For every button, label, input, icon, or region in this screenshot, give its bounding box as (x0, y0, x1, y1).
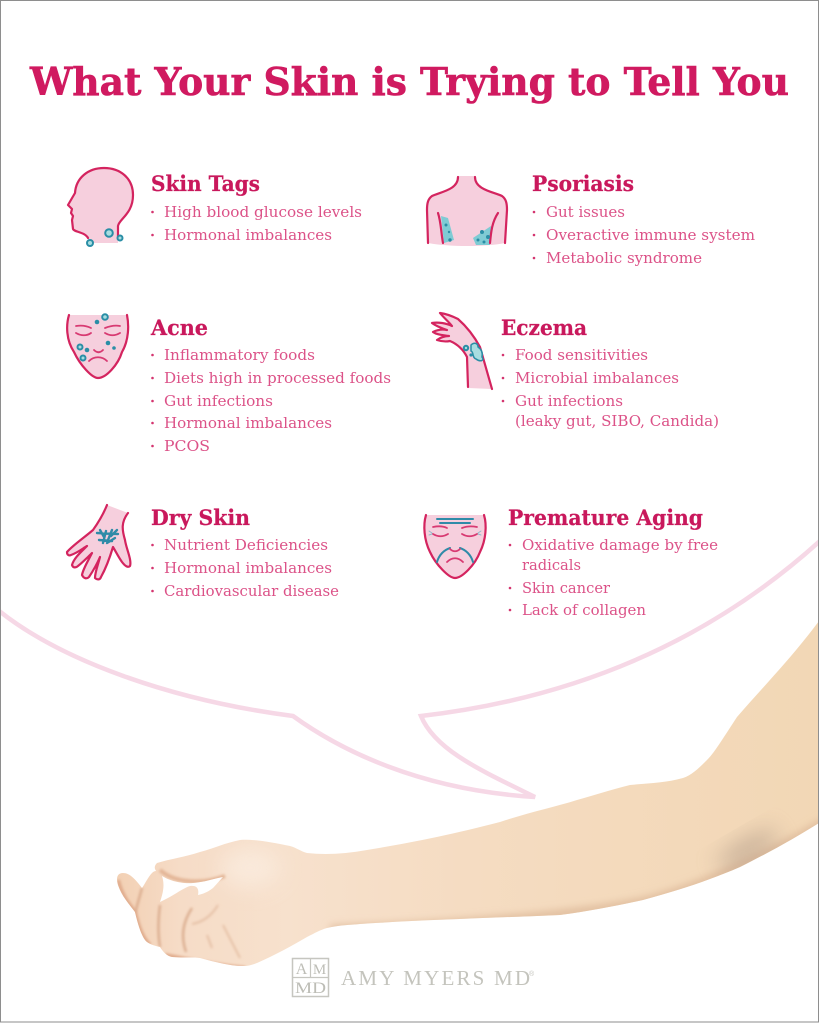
causes list (509, 538, 718, 619)
logo mark (292, 958, 328, 997)
heading: Acne (150, 315, 208, 340)
causes list: Inflammatory foods (164, 348, 315, 364)
icon: torso with patches (427, 176, 507, 246)
causes list: High blood glucose levels (164, 205, 362, 221)
arm and hand (117, 622, 818, 966)
panel: eczema (432, 313, 719, 430)
causes list: Metabolic syndrome (546, 251, 702, 267)
causes list: Oxidative damage by free (522, 538, 718, 554)
icon: head with skin tags (68, 168, 133, 246)
panel: acne (67, 314, 391, 455)
panel: premature aging (424, 505, 718, 619)
causes list: Nutrient Deficiencies (164, 538, 328, 554)
panel: psoriasis (427, 171, 755, 267)
icon: aged face with wrinkles (424, 515, 486, 578)
causes list: Skin cancer (522, 581, 610, 597)
causes list: Food sensitivities (515, 348, 648, 364)
logo wordmark: AMY MYERS MD (341, 966, 530, 990)
title: What Your Skin is Trying to Tell You (29, 59, 789, 104)
causes list: Microbial imbalances (515, 371, 679, 387)
causes list: Overactive immune system (546, 228, 755, 244)
logo: Amy Myers MD (292, 958, 535, 997)
icon: hand with dry patch (67, 505, 130, 579)
causes list: Gut infections (515, 394, 623, 410)
causes list: PCOS (164, 439, 210, 455)
heading: Dry Skin (151, 505, 250, 530)
causes list (151, 205, 362, 244)
causes list: Lack of collagen (522, 603, 646, 619)
causes list: Hormonal imbalances (164, 561, 332, 577)
logo mark: A (296, 961, 308, 978)
causes list: Diets high in processed foods (164, 371, 391, 387)
causes list: Gut infections (164, 394, 273, 410)
registered mark: ® (529, 970, 535, 978)
heading: Premature Aging (508, 505, 703, 530)
icon: face with acne (67, 314, 128, 378)
heading: Eczema (501, 315, 587, 340)
causes list: Hormonal imbalances (164, 416, 332, 432)
causes list (151, 538, 339, 600)
panel: dry skin (67, 505, 339, 600)
speech bubble outline (0, 540, 819, 797)
causes list: Hormonal imbalances (164, 228, 332, 244)
causes list: Cardiovascular disease (164, 584, 339, 600)
causes list: radicals (522, 558, 581, 574)
heading: Psoriasis (532, 171, 634, 196)
causes list (151, 348, 391, 455)
causes list: (leaky gut, SIBO, Candida) (515, 414, 719, 430)
causes list (502, 348, 719, 430)
icon: hand and wrist with eczema (432, 313, 492, 389)
logo mark: MD (295, 980, 326, 997)
causes list: Gut issues (546, 205, 625, 221)
panel: skin tags (68, 168, 362, 246)
logo mark: M (313, 962, 326, 978)
causes list (533, 205, 755, 267)
heading: Skin Tags (151, 171, 260, 196)
